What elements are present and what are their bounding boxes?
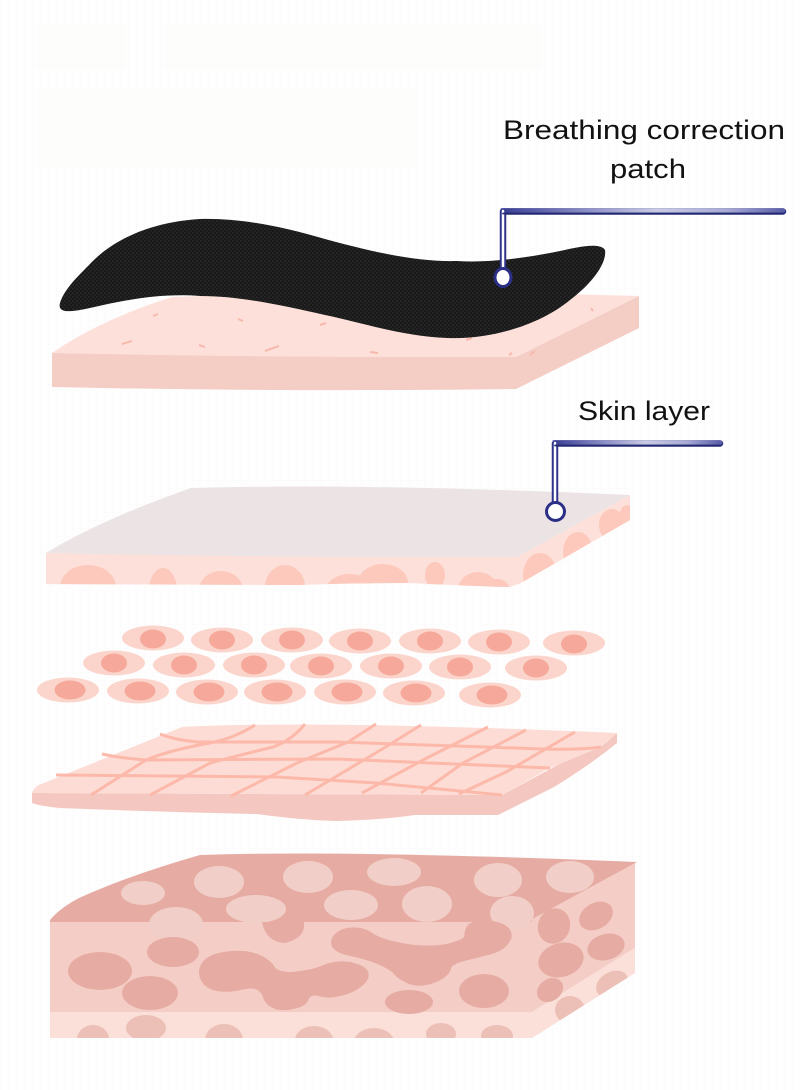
cells on lower front band bbox=[77, 1015, 513, 1038]
front face bbox=[50, 921, 532, 1013]
breathing correction patch bbox=[60, 219, 605, 338]
layer 5: thick fat tissue block bbox=[50, 854, 637, 1056]
label: skin layer: Skin layer bbox=[578, 396, 710, 426]
blobs on the right face bbox=[523, 505, 630, 582]
cell row 1 bbox=[122, 626, 605, 656]
right face bbox=[532, 862, 635, 1012]
top surface bbox=[50, 854, 637, 922]
label: breathing correction patch bbox=[503, 115, 785, 184]
layer 3: epidermal cells bbox=[37, 626, 605, 708]
right lower band bbox=[532, 948, 635, 1038]
infographic: exploded skin layers with patch bbox=[32, 120, 786, 1038]
fat cells on top surface bbox=[121, 858, 594, 941]
fat cells on right face bbox=[532, 896, 628, 1007]
label: breathing correction patch: patch bbox=[610, 154, 686, 184]
blobs on the front face bbox=[60, 562, 509, 587]
fat cells on front face bbox=[68, 922, 510, 1014]
grid lines bbox=[56, 724, 601, 796]
label: breathing correction patch: Breathing correction bbox=[503, 115, 785, 145]
leader line: skin layer callout bbox=[546, 442, 720, 520]
leader line: patch callout bbox=[495, 210, 783, 286]
layer 2: skin layer slab bbox=[46, 486, 630, 587]
cell row 2 bbox=[83, 650, 567, 680]
cells on right lower band bbox=[555, 970, 628, 1020]
cell row 3 bbox=[37, 678, 521, 708]
lower front band bbox=[50, 1012, 532, 1038]
layer 1: skin slab under the patch bbox=[52, 290, 639, 390]
layer 4: grid textured slab bbox=[32, 724, 617, 821]
